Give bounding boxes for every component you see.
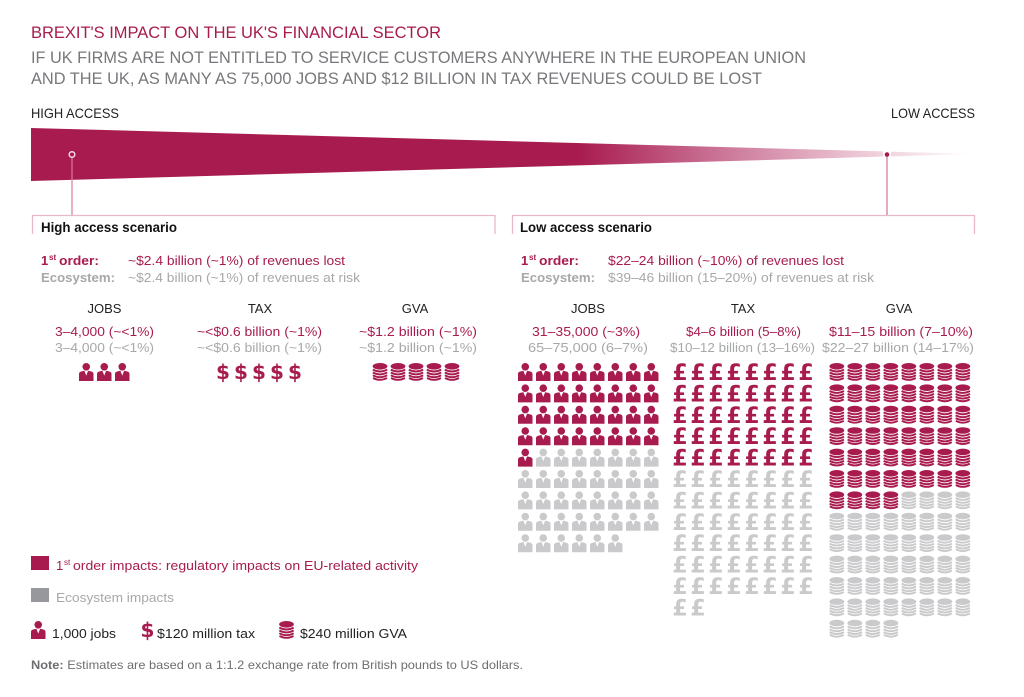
icon grid: gva bbox=[829, 363, 970, 637]
gva column: low access: GVA bbox=[886, 301, 913, 316]
legend: first order impacts: order impacts: regulatory impacts on EU-related activity bbox=[73, 558, 419, 573]
revenue summary: low access: $39–46 billion (15–20%) of revenues at risk bbox=[608, 270, 875, 285]
subtitle: IF UK FIRMS ARE NOT ENTITLED TO SERVICE CUSTOMERS ANYWHERE IN THE EUROPEAN UNION bbox=[31, 48, 806, 67]
revenue summary: high access: ~$2.4 billion (~1%) of revenues at risk bbox=[128, 270, 361, 285]
title: BREXIT'S IMPACT ON THE UK'S FINANCIAL SECTOR bbox=[31, 23, 441, 42]
access wedge bbox=[31, 128, 975, 181]
legend: jobs icon key bbox=[31, 621, 117, 641]
label: low access: LOW ACCESS bbox=[891, 105, 975, 121]
jobs column: high access bbox=[55, 301, 154, 381]
revenue summary: low access bbox=[521, 253, 875, 285]
legend: gva icon key bbox=[279, 621, 407, 641]
jobs column: high access: 3–4,000 (~<1%) bbox=[55, 340, 154, 355]
legend: first order impacts: 1 bbox=[56, 558, 63, 573]
icon grid: tax: ££££££££ bbox=[672, 361, 814, 386]
icon grid: tax: ££££££££ bbox=[672, 575, 814, 600]
tax column: low access: TAX bbox=[731, 301, 755, 316]
gva column: low access bbox=[822, 301, 974, 637]
tax column: low access bbox=[670, 301, 815, 621]
legend: tax icon key: $ bbox=[141, 618, 154, 642]
tax column: low access: $10–12 billion (13–16%) bbox=[670, 340, 815, 355]
revenue summary: low access: order: bbox=[539, 253, 579, 268]
heading: low access scenario: Low access scenario bbox=[520, 220, 652, 235]
icon grid: jobs bbox=[518, 363, 658, 552]
legend bbox=[31, 556, 419, 642]
icon grid: tax: ££ bbox=[672, 596, 706, 621]
icon grid: tax: ££££££££ bbox=[672, 489, 814, 514]
revenue summary: high access: 1 bbox=[41, 253, 48, 268]
revenue summary: low access: st bbox=[529, 253, 536, 262]
revenue summary: high access: ~$2.4 billion (~1%) of revenues lost bbox=[128, 253, 345, 268]
revenue summary: high access: order: bbox=[59, 253, 99, 268]
legend: ecosystem impacts: Ecosystem impacts bbox=[56, 590, 175, 605]
tax column: low access: $4–6 billion (5–8%) bbox=[686, 324, 801, 339]
revenue summary: low access: Ecosystem: bbox=[521, 270, 595, 285]
revenue summary: high access: Ecosystem: bbox=[41, 270, 115, 285]
revenue summary: high access bbox=[41, 253, 361, 285]
icon grid: tax: ££££££££ bbox=[672, 468, 814, 493]
legend: tax icon key: $120 million tax bbox=[157, 626, 256, 641]
jobs column: high access: JOBS bbox=[88, 301, 122, 316]
tax column: high access: $$$$$ bbox=[216, 360, 302, 384]
gva column: low access: $11–15 billion (7–10%) bbox=[829, 324, 973, 339]
revenue summary: low access: 1 bbox=[521, 253, 528, 268]
tax column: high access bbox=[197, 301, 322, 384]
tax column: high access: ~<$0.6 billion (~1%) bbox=[197, 340, 322, 355]
legend: first order impacts: st bbox=[64, 558, 71, 567]
jobs column: low access: 65–75,000 (6–7%) bbox=[528, 340, 648, 355]
icon grid: tax: ££££££££ bbox=[672, 425, 814, 450]
legend: gva icon key: $240 million GVA bbox=[300, 626, 407, 641]
connector: low access bbox=[883, 150, 891, 215]
jobs column: low access bbox=[518, 301, 658, 552]
subtitle bbox=[31, 48, 806, 88]
panel: high access scenario bbox=[32, 216, 495, 384]
jobs column: low access: 31–35,000 (~3%) bbox=[532, 324, 640, 339]
connector: high access bbox=[69, 152, 75, 215]
note: Note: Estimates are based on a 1:1.2 exchange rate from British pounds to US dollars. bbox=[31, 658, 523, 672]
tax column: high access: ~<$0.6 billion (~1%) bbox=[197, 324, 322, 339]
revenue summary: low access: $22–24 billion (~10%) of revenues lost bbox=[608, 253, 844, 268]
icon grid: tax: ££££££££ bbox=[672, 447, 814, 472]
gva column: high access: GVA bbox=[402, 301, 429, 316]
icon grid: tax: ££££££££ bbox=[672, 404, 814, 429]
label: high access: HIGH ACCESS bbox=[31, 105, 119, 121]
panel frame: low access bbox=[512, 216, 974, 234]
legend: tax icon key bbox=[141, 618, 256, 642]
tax column: high access: TAX bbox=[248, 301, 272, 316]
gva column: high access: ~$1.2 billion (~1%) bbox=[359, 340, 477, 355]
subtitle: AND THE UK, AS MANY AS 75,000 JOBS AND $12 BILLION IN TAX REVENUES COULD BE LOST bbox=[31, 69, 762, 88]
legend: ecosystem impacts bbox=[31, 588, 175, 605]
icon grid: tax: ££££££££ bbox=[672, 532, 814, 557]
icon grid: tax: ££££££££ bbox=[672, 554, 814, 579]
jobs column: high access: 3–4,000 (~<1%) bbox=[55, 324, 154, 339]
icon grid: tax bbox=[672, 361, 814, 621]
gva column: high access: ~$1.2 billion (~1%) bbox=[359, 324, 477, 339]
heading: high access scenario: High access scenario bbox=[41, 220, 177, 235]
panel: low access scenario bbox=[512, 216, 974, 637]
gva column: high access bbox=[359, 301, 477, 380]
legend: jobs icon key: 1,000 jobs bbox=[52, 626, 117, 641]
gva column: low access: $22–27 billion (14–17%) bbox=[822, 340, 974, 355]
panel frame: high access bbox=[32, 216, 495, 234]
jobs column: low access: JOBS bbox=[571, 301, 605, 316]
icon grid: tax: ££££££££ bbox=[672, 382, 814, 407]
revenue summary: high access: st bbox=[49, 253, 56, 262]
icon grid: tax: ££££££££ bbox=[672, 511, 814, 536]
